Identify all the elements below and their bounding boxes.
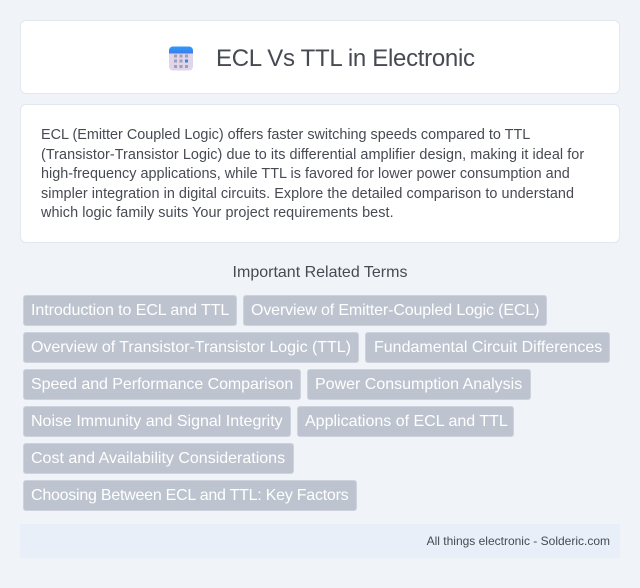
tag <box>297 406 514 437</box>
tag <box>243 295 547 326</box>
tag: Speed and Performance Comparison <box>31 376 293 393</box>
heading: related terms: Important Related Terms <box>233 264 407 281</box>
tag <box>365 332 610 363</box>
header card <box>20 20 620 94</box>
tag: Applications of ECL and TTL <box>305 413 508 430</box>
title: ECL Vs TTL in Electronic <box>216 45 475 72</box>
tag: Cost and Availability Considerations <box>31 450 285 467</box>
tag <box>23 480 357 511</box>
panel: description <box>20 104 620 243</box>
icon: calendar <box>169 46 193 70</box>
tag: Overview of Transistor-Transistor Logic (TTL) <box>31 339 351 356</box>
description text: simpler integration in digital circuits. Explore the detailed comparison to understand <box>41 186 574 202</box>
tag <box>307 369 531 400</box>
description text: high-frequency applications, while TTL is favored for lower power consumption and <box>41 166 570 182</box>
tag: Choosing Between ECL and TTL: Key Factors <box>31 487 348 504</box>
description text: (Transistor-Transistor Logic) due to its differential amplifier design, making it ideal for <box>41 146 584 162</box>
tag: Fundamental Circuit Differences <box>374 339 602 356</box>
tag <box>23 406 291 437</box>
tag <box>23 369 301 400</box>
panel: related term tags <box>23 295 610 511</box>
tag <box>23 443 294 474</box>
tag: Introduction to ECL and TTL <box>31 302 229 319</box>
description text <box>41 127 584 221</box>
tag <box>23 332 359 363</box>
footer text: All things electronic - Solderic.com <box>427 534 610 548</box>
tag: Overview of Emitter-Coupled Logic (ECL) <box>251 302 539 319</box>
tag: Noise Immunity and Signal Integrity <box>31 413 283 430</box>
tag: Power Consumption Analysis <box>315 376 522 393</box>
description text: ECL (Emitter Coupled Logic) offers faster switching speeds compared to TTL <box>41 127 530 143</box>
footer <box>20 524 620 558</box>
description text: which logic family suits Your project requirements best. <box>41 205 394 221</box>
tag <box>23 295 237 326</box>
